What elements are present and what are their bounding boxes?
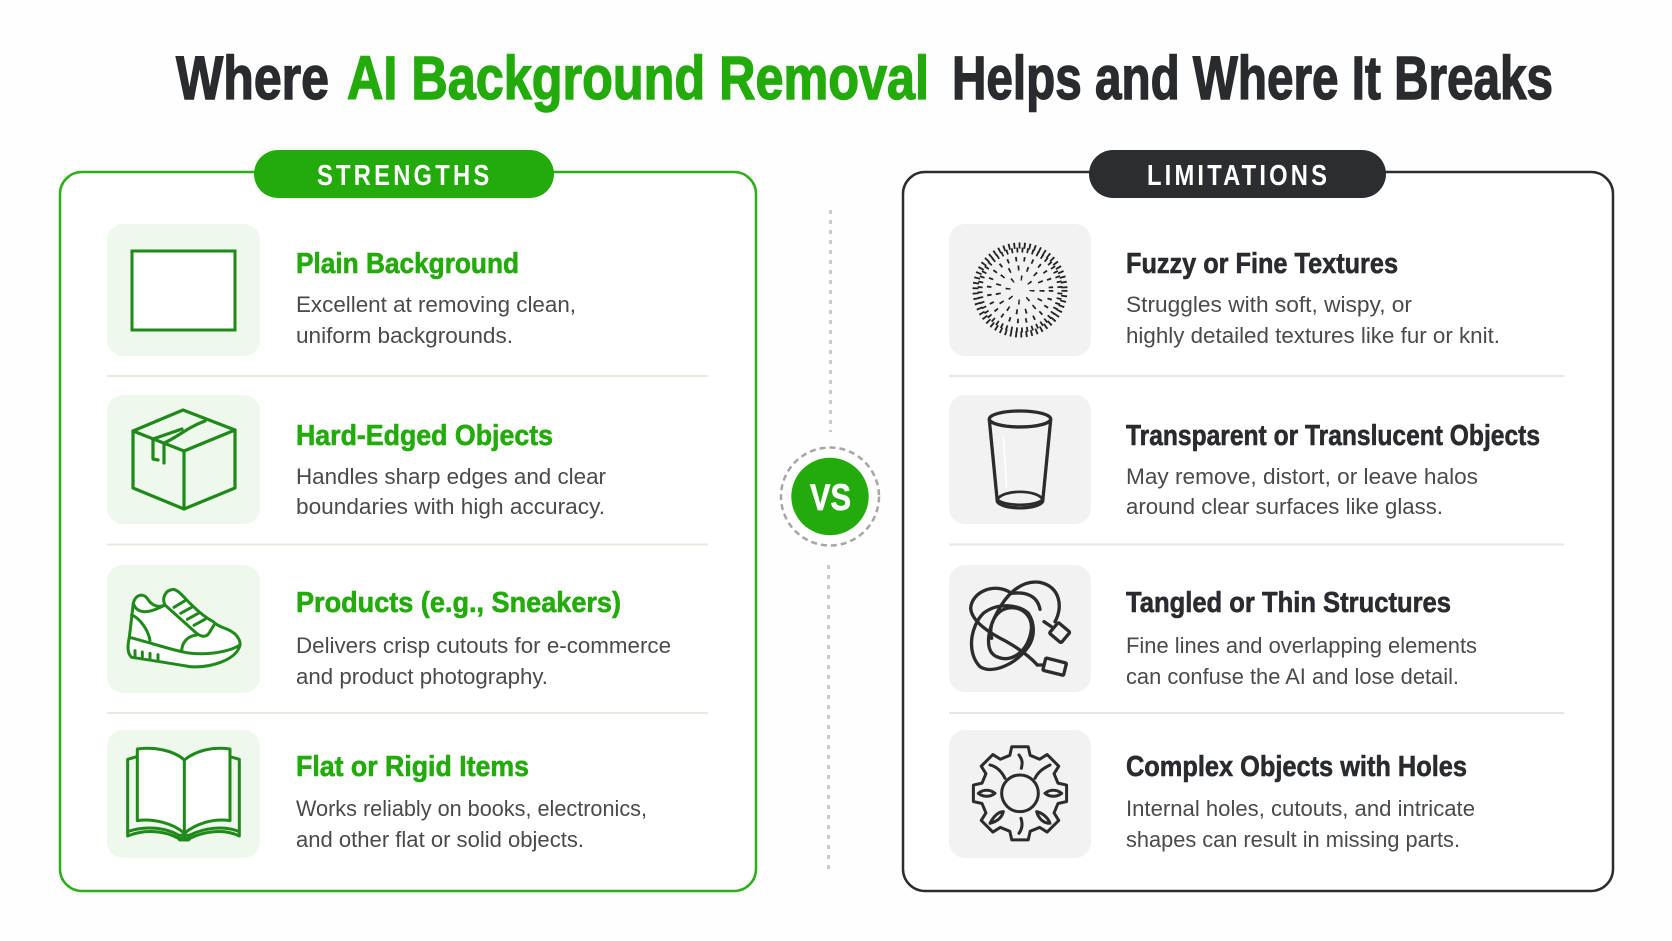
- panel: limitations: [903, 150, 1613, 891]
- description: tangled structures: can confuse the AI and lose detail.: [1126, 664, 1459, 689]
- description: hard-edged objects: Handles sharp edges and clear: [296, 464, 606, 489]
- description: products: [296, 633, 671, 689]
- description: flat items: and other flat or solid objects.: [296, 827, 584, 852]
- row: plain background: [107, 224, 576, 356]
- description: flat items: [296, 796, 647, 852]
- divider: vertical dotted line bottom: [827, 565, 830, 870]
- icon: fuzzy ball: [949, 224, 1091, 356]
- heading: complex objects: Complex Objects with Holes: [1126, 751, 1467, 783]
- description: tangled structures: Fine lines and overlapping elements: [1126, 633, 1477, 658]
- title: AI Background Removal: [347, 44, 929, 112]
- icon: sneaker: [107, 565, 260, 693]
- icon: cardboard box: [107, 395, 260, 524]
- row: hard-edged objects: [107, 395, 606, 524]
- heading: products: Products (e.g., Sneakers): [296, 587, 621, 619]
- strengths pill heading: STRENGTHS: [317, 159, 489, 192]
- description: complex objects: Internal holes, cutouts, and intricate: [1126, 796, 1475, 821]
- description: fuzzy textures: Struggles with soft, wispy, or: [1126, 292, 1412, 317]
- row: complex objects: [949, 730, 1475, 858]
- description: plain background: uniform backgrounds.: [296, 323, 513, 348]
- icon: glass: [949, 395, 1091, 524]
- icon: tangled cable: [949, 565, 1091, 692]
- row: flat items: [107, 730, 647, 858]
- description: plain background: [296, 292, 576, 348]
- panel: strengths: [60, 150, 756, 891]
- description: tangled structures: [1126, 633, 1477, 689]
- icon: gear with holes: [949, 730, 1091, 858]
- title: Where: [176, 44, 329, 112]
- description: complex objects: [1126, 796, 1475, 852]
- icon: plain square: [107, 224, 260, 356]
- description: flat items: Works reliably on books, electronics,: [296, 796, 647, 821]
- heading: hard-edged objects: Hard-Edged Objects: [296, 420, 553, 452]
- description: products: Delivers crisp cutouts for e-commerce: [296, 633, 671, 658]
- row: tangled structures: [949, 565, 1477, 692]
- description: hard-edged objects: boundaries with high accuracy.: [296, 494, 605, 519]
- description: fuzzy textures: [1126, 292, 1500, 348]
- description: plain background: Excellent at removing clean,: [296, 292, 576, 317]
- description: transparent objects: around clear surfaces like glass.: [1126, 494, 1443, 519]
- limitations pill heading: [1089, 150, 1386, 198]
- title: [176, 44, 1553, 112]
- heading: plain background: Plain Background: [296, 248, 519, 280]
- description: complex objects: shapes can result in missing parts.: [1126, 827, 1460, 852]
- VS badge: [781, 448, 879, 546]
- description: products: and product photography.: [296, 664, 548, 689]
- heading: tangled structures: Tangled or Thin Structures: [1126, 587, 1451, 619]
- limitations pill heading: LIMITATIONS: [1147, 159, 1327, 192]
- VS badge: VS: [810, 477, 851, 518]
- icon: open book: [107, 730, 260, 858]
- description: transparent objects: [1126, 464, 1478, 519]
- strengths pill heading: [254, 150, 554, 198]
- description: transparent objects: May remove, distort, or leave halos: [1126, 464, 1478, 489]
- description: fuzzy textures: highly detailed textures like fur or knit.: [1126, 323, 1500, 348]
- divider: vertical dotted line top: [829, 210, 832, 432]
- row: fuzzy textures: [949, 224, 1500, 356]
- row: products: [107, 565, 671, 693]
- heading: fuzzy textures: Fuzzy or Fine Textures: [1126, 248, 1398, 280]
- heading: transparent objects: Transparent or Translucent Objects: [1126, 420, 1540, 452]
- row: transparent objects: [949, 395, 1540, 524]
- description: hard-edged objects: [296, 464, 606, 519]
- heading: flat items: Flat or Rigid Items: [296, 751, 529, 783]
